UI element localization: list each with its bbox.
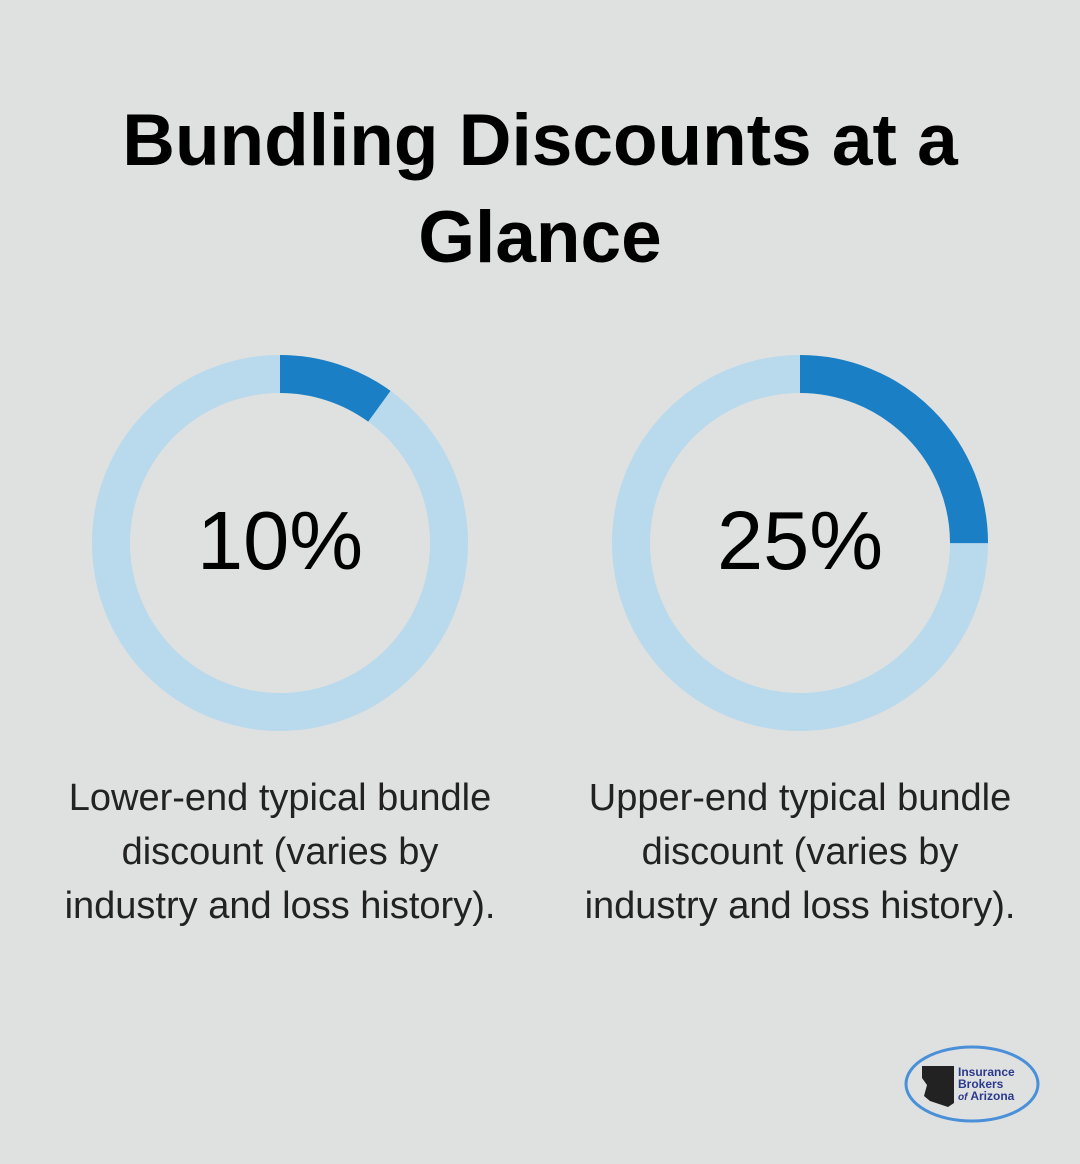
caption right: Upper-end typical bundle <box>589 777 1011 819</box>
title: Glance <box>418 197 662 278</box>
caption left: industry and loss history). <box>65 885 495 927</box>
logo: Brokers <box>958 1077 1004 1091</box>
caption right <box>585 777 1015 927</box>
caption left: discount (varies by <box>122 831 438 873</box>
caption left <box>65 777 495 927</box>
title: Bundling Discounts at a <box>122 100 958 181</box>
logo <box>906 1047 1038 1121</box>
value 10%: 10% <box>197 494 363 587</box>
value 25%: 25% <box>717 494 883 587</box>
logo: of Arizona <box>958 1089 1015 1103</box>
title <box>122 100 958 278</box>
donut chart left <box>111 374 449 712</box>
logo: Insurance <box>958 1065 1015 1079</box>
caption right: industry and loss history). <box>585 885 1015 927</box>
donut chart right <box>631 374 969 712</box>
caption right: discount (varies by <box>642 831 958 873</box>
caption left: Lower-end typical bundle <box>69 777 491 819</box>
